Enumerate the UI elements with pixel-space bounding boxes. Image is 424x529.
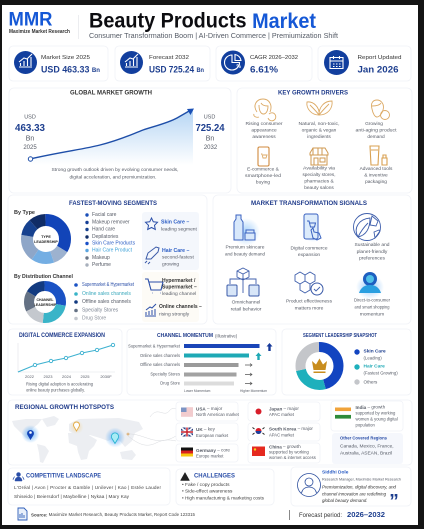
legend: Skin Care [364,348,386,354]
driver: specialty stores [302,148,336,191]
country: South Korea: South Korea – major [269,426,313,431]
start value: Bn [26,136,34,142]
icon: quote mark: ” [389,492,399,512]
country: USA [176,402,240,421]
signal: direct-to-consumer: Direct-to-consumer [354,298,390,304]
panel: key growth drivers [237,88,412,193]
subheading: by distribution channel: By Distribution Channel [14,274,73,280]
analyst details: Research Manager, Maximize Market Research [322,476,401,482]
callout: channels: Supermarket – [162,284,197,290]
country: Japan: Japan – major [269,406,299,411]
chart: growth area line [28,108,194,165]
driver: e-commerce [245,147,281,186]
footer forecast period: Forecast period: [299,512,342,519]
KPI: report updated: Jan 2026 [358,64,398,76]
signal: omnichannel retail [227,268,262,312]
KPI: report updated: Report Updated [358,55,402,61]
driver: specialty stores: specialty stores, [302,172,336,178]
legend: Hair Care [364,364,385,370]
driver: e-commerce: buying [256,180,270,186]
legend: type: Facial care [92,212,117,218]
legend: channel [74,282,134,322]
donut: channel leadership: CHANNEL [36,298,54,302]
KPI: CAGR: 6.61% [250,64,279,76]
panel: global market growth [9,88,231,193]
line chart [18,343,115,379]
panel: competitive landscape [8,468,170,505]
donut chart [300,347,338,385]
driver: natural ingredients [298,101,340,140]
KPI: forecast 2032: USD 725.24 Bn [149,64,204,76]
start value: USD [24,114,36,120]
KPI: forecast 2032 [115,46,210,81]
callout: channels [142,272,202,322]
signal: premium skincare: Premium skincare [226,244,265,250]
end value: Bn [206,136,214,142]
analyst details: Siddhi Dole [322,470,349,476]
KPI: market size 2025 [9,46,108,81]
icon: warning [180,472,190,480]
driver: anti-aging demand: Growing [365,121,383,127]
icon: people [13,472,24,481]
caption [52,167,178,180]
driver: appearance awareness: Rising consumer [246,121,283,127]
signal: premium skincare [225,215,265,258]
start value: 463.33 [15,122,45,134]
line chart: 2030F [100,374,112,379]
country: Germany: Germany – core [196,448,230,452]
icon: analyst avatar [298,474,320,496]
heading: SEGMENT LEADERSHIP SNAPSHOT [303,333,377,339]
driver: advanced packaging: & inventive [364,172,388,178]
challenge list: • High manufacturing & marketing costs [182,496,265,502]
country: Japan [248,402,320,421]
country: China: women & internet access [269,455,316,460]
signal: digital commerce: expansion [298,252,320,258]
country: UK: UK – key [196,426,216,432]
driver: advanced packaging: Advanced tools [360,166,393,172]
legend: type: Makeup remover [92,220,130,226]
callout: skin and hair: second-fastest [162,254,194,260]
start value [15,114,45,151]
end value: USD [204,114,215,120]
signal: sustainable preferences [354,214,390,262]
other covered regions: Australia, ASEAN, Brazil [340,450,392,456]
legend: type: Makeup [92,255,110,261]
challenge list: • Fake / copy products [182,482,230,488]
quote text [322,484,396,503]
bar chart: Drug Store [160,380,181,386]
driver: e-commerce: smartphone-led [245,173,281,179]
country: USA: USA – major [196,406,223,411]
signal: sustainable preferences: Sustainable and [354,242,390,248]
analyst details [322,470,401,482]
driver: anti-aging demand: demand [367,134,385,140]
panel: challenges [176,469,274,505]
legend: type: Skin Care Products [92,240,136,246]
panel: channel momentum [127,329,276,395]
bar chart: Supermarket & Hypermarket [128,344,181,348]
pin: Europe [70,420,84,434]
callout: skin and hair [142,212,199,270]
legend: channel: Offline sales channels [82,299,131,305]
driver: advanced packaging: packaging [365,179,387,185]
heading: DIGITAL COMMERCE EXPANSION [19,333,105,339]
driver: specialty stores: pharmacies & [304,178,334,184]
driver: appearance awareness: appearance [251,128,277,134]
legend: type: Hair Care Product [92,248,133,254]
bar chart: Higher Momentum [240,389,267,393]
panel: segment leadership snapshot [282,329,411,395]
heading: CHANNEL MOMENTUM [157,333,213,339]
footer source [18,508,195,520]
icon: document [18,508,27,520]
country: India: women & young digital [356,416,398,422]
world map [12,408,176,463]
company list: Shiseido | Beiersdorf | Maybelline | Nykaa | Mary Kay [14,494,130,499]
callout: channels: Online channels – [159,304,202,310]
bar chart: Offline sales channels [140,362,180,367]
caption: online beauty purchases globally. [26,388,85,392]
KPI: market size 2025: Market Size 2025 [41,55,90,61]
callout: skin and hair: growing [162,262,179,268]
signal: direct-to-consumer: and smart shopping [354,304,390,310]
panel: fastest-moving segments [8,195,207,324]
country: India: supported by working [356,410,396,416]
panel: digital commerce expansion [8,329,122,395]
pin: North America [22,425,40,443]
footer forecast period: 2026–2032 [347,512,385,519]
country: South Korea [248,423,320,441]
caption: Strong growth outlook driven by evolving consumer needs, [52,167,178,173]
KPI: market size 2025: USD 463.33 Bn [41,64,100,76]
footer forecast period [299,512,385,519]
country: Germany: Europe market [196,454,224,458]
panel: regional growth hotspots [8,400,412,465]
donut: type leadership: TYPE [41,235,51,239]
line chart: 2023 [44,374,53,379]
footer source: Source: Maximize Market Research, Beauty Products Market, Report Code 123315 [31,512,195,518]
callout: channels: Hypermarket / [162,278,196,284]
other covered regions: Canada, Mexico, France, [340,444,394,450]
callout: channels: rising strongly [159,312,190,318]
country: India [331,401,403,431]
driver: e-commerce: E-commerce & [247,166,280,172]
heading: (Illustrative) [215,334,238,338]
driver: appearance awareness: awareness [252,134,276,140]
donut: type leadership: LEADERSHIP [34,240,58,244]
line chart: 2022 [25,374,35,379]
country: USA: North American market [196,412,240,417]
pin: Asia [105,428,125,448]
KPI: report updated [318,46,411,81]
donut: channel leadership: LEADERSHIP [34,303,57,307]
driver: specialty stores: Availability via [303,166,335,172]
heading: CHALLENGES [194,472,235,480]
challenge list [182,482,265,502]
country: India: population [356,422,375,428]
driver: natural ingredients: organic & vegan [302,128,337,134]
driver: anti-aging demand: anti-aging product [356,128,397,134]
country: China: supported by working [269,450,309,454]
subtitle: Consumer Transformation Boom | AI-Driven Commerce | Premiumization Shift [89,33,338,40]
title: Beauty Products Market [89,10,316,32]
heading: COMPETITIVE LANDSCAPE [26,474,101,480]
legend [354,348,398,385]
heading: FASTEST-MOVING SEGMENTS [69,200,157,207]
company list: L'Oréal | Avon | Procter & Gamble | Unilever | Kao | Estée Lauder [14,485,161,490]
legend: channel: Supermarket & Hypermarket [82,282,134,288]
country: UK [176,423,238,441]
callout: skin and hair: Skin Care – [161,220,189,226]
quote text: global beauty demand. [322,498,368,503]
driver: anti-aging demand [356,100,397,140]
KPI: CAGR [216,46,312,81]
panel: analyst quote [291,467,411,512]
legend: (Leading) [364,356,382,360]
end value: 2032 [204,145,218,151]
panel: market transformation signals [213,195,411,324]
heading: REGIONAL GROWTH HOTSPOTS [15,405,114,411]
signal: product effectiveness: matters more [295,306,324,312]
other covered regions [332,433,403,464]
country: Japan: APAC market [269,412,295,417]
legend: channel: Specialty Stores [82,308,119,314]
caption [26,382,93,392]
signal: digital commerce: Digital commerce [290,246,328,252]
country: China: China – growth [269,444,301,449]
icon: crown [312,358,327,373]
driver: specialty stores: beauty salons [304,185,334,191]
other covered regions: Other Covered Regions [340,436,387,442]
legend: channel: Online sales channels [82,291,131,297]
driver: natural ingredients: ingredients [307,134,331,140]
callout: skin and hair: leading segment [161,226,198,232]
donut: type leadership [27,220,65,258]
legend: channel: Drug Store [82,316,106,322]
bar chart [128,343,272,393]
company list [14,485,161,499]
signal: omnichannel retail: Omnichannel [232,300,260,306]
start value: 2025 [23,145,37,151]
logo: MMR: Maximize Market Research [9,29,70,35]
logo: MMR: MMR [8,10,53,30]
donut: channel leadership [29,286,61,318]
quote text: channel innovation are redefining [322,492,386,496]
country: South Korea: APAC market [269,432,295,438]
signal: product effectiveness: Product effectiveness [286,298,333,304]
challenge list: • Side-effect awareness [182,488,233,494]
country: China [248,443,320,463]
legend: type [85,212,136,268]
signal: product effectiveness [286,272,333,312]
signal: direct-to-consumer: momentum [360,312,384,318]
heading: KEY GROWTH DRIVERS [278,90,348,96]
legend: type: Perfume [92,262,111,268]
country: UK: European market [196,433,229,438]
end value [196,114,225,151]
KPI: forecast 2032: Forecast 2032 [149,55,189,61]
driver: advanced packaging [360,146,393,185]
bar chart: Online sales channels [140,353,180,358]
KPI: CAGR: CAGR 2026–2032 [250,55,298,61]
signal: sustainable preferences: preferences [359,256,385,262]
signal: direct-to-consumer [354,272,390,318]
bar chart: Lower Momentum [184,389,211,393]
callout: skin and hair: Hair Care – [162,248,190,254]
KPI: CAGR: % [236,64,242,70]
legend: type: Hand care [92,226,115,232]
callout: channels: leading channel [162,291,196,297]
caption: digital acceleration, and premiumization. [70,174,156,180]
country: India: India – growth [356,404,386,410]
logo: MMR [8,10,70,35]
signal: premium skincare: and beauty demand [225,252,265,258]
caption: Rising digital adoption is accelerating [26,382,93,386]
legend: (Fastest Growing) [364,370,398,376]
driver: natural ingredients: Natural, non-toxic, [298,121,340,127]
signal: digital commerce [290,214,328,258]
heading: MARKET TRANSFORMATION SIGNALS [251,200,367,207]
heading: global market growth: GLOBAL MARKET GROWTH [70,90,153,96]
line chart: 2024 [62,374,72,379]
end value: 725.24 [196,122,225,134]
driver: appearance awareness [246,99,283,140]
legend: type: Depilatories [92,234,119,240]
line chart: 2025 [81,374,90,379]
legend: Others [364,380,378,384]
signal: omnichannel retail: retail behavior [231,306,262,312]
signal: sustainable preferences: planet-friendly [357,249,388,255]
bar chart: Specialty Stores [150,372,180,376]
subheading: by type: By Type [14,210,35,216]
country: Germany [176,444,238,462]
quote text: Premiumization, digital discovery, and [322,484,396,490]
